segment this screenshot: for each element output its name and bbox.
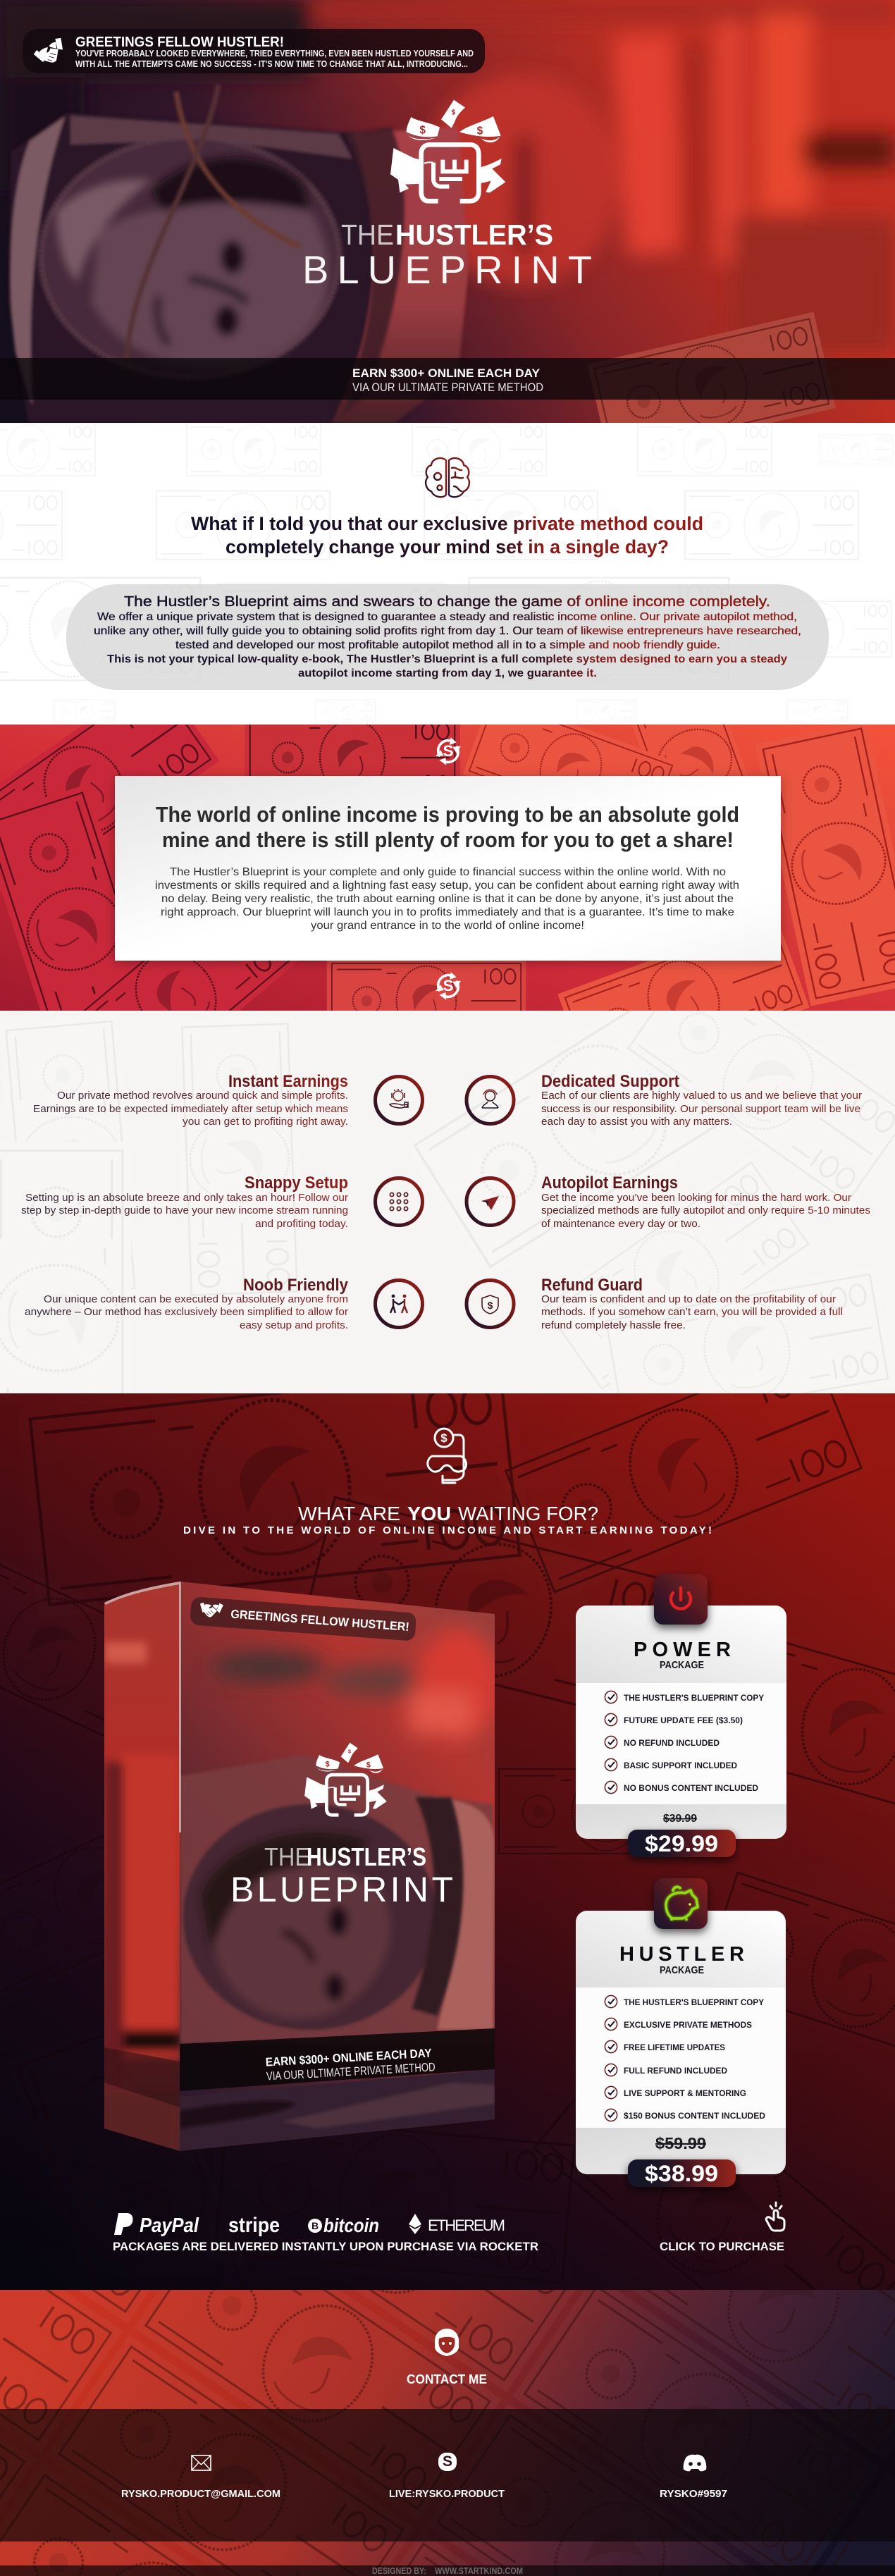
heading: completely change your mind set in a single day? [226, 536, 669, 557]
card: power package [576, 1574, 786, 1857]
price: 38.99: $38.99 [645, 2161, 718, 2186]
text pill: autopilot income starting from day 1, we guarantee it. [298, 667, 597, 679]
feature: autopilot earnings: Get the income you’ve been looking for minus the hard work. Our [541, 1192, 851, 1204]
designer credit: DESIGNED BY: [372, 2565, 426, 2576]
contact: email: RYSKO.PRODUCT@GMAIL.COM [121, 2488, 280, 2500]
white box: mine and there is still plenty of room for you to get a share! [162, 827, 734, 852]
white box: right approach. Our blueprint will launch you in to profits immediately and that is a guarantee. It’s time to make [161, 906, 734, 918]
heading: what are you waiting for: DIVE IN TO THE WORLD OF ONLINE INCOME AND START EARNING TODAY! [183, 1524, 712, 1536]
feature: refund guard: methods. If you somehow can’t earn, you will be provided a full [541, 1306, 843, 1318]
icon: coin hand [375, 1077, 423, 1123]
icon: agent [435, 2329, 459, 2356]
title: the hustler's blueprint: HUSTLER’S [395, 218, 553, 251]
white box: investments or skills required and a lightning fast easy setup, you can be confident about earning right away with [155, 880, 739, 892]
box greeting pill: GREETINGS FELLOW HUSTLER! [230, 1607, 409, 1634]
box title [230, 1842, 453, 1909]
card: hustler package: LIVE SUPPORT & MENTORING [624, 2088, 746, 2098]
icon: headset support [467, 1077, 514, 1123]
box title: BLUEPRINT [230, 1870, 453, 1909]
feature: noob friendly [25, 1276, 349, 1331]
feature: autopilot earnings: of maintenance every day or two. [541, 1218, 700, 1230]
payment logos: bitcoin [323, 2214, 379, 2236]
card: hustler package: $59.99 [655, 2134, 706, 2152]
feature: snappy setup: Setting up is an absolute breeze and only takes an hour! Follow our [25, 1192, 348, 1204]
feature: instant earnings: you can get to profiting right away. [183, 1116, 348, 1128]
feature: instant earnings: Earnings are to be expected immediately after setup which means [33, 1103, 348, 1115]
payment logos: PayPal [140, 2214, 199, 2237]
contact: discord: RYSKO#9597 [660, 2488, 727, 2500]
icon: piggy bank [654, 1878, 708, 1929]
panel: pricing [0, 1336, 895, 2404]
product box [104, 1579, 500, 2157]
feature: dedicated support: Dedicated Support [541, 1072, 679, 1091]
box title: HUSTLER’S [307, 1842, 426, 1871]
card: power package: THE HUSTLER'S BLUEPRINT COPY [624, 1693, 764, 1703]
box tagline [265, 2046, 436, 2083]
feature: refund guard: Our team is confident and up to date on the profitability of our [541, 1293, 836, 1305]
feature: snappy setup: Snappy Setup [245, 1173, 348, 1193]
feature: dedicated support: each day to assist you with any matters. [541, 1116, 732, 1128]
feature: snappy setup: and profiting today. [255, 1218, 348, 1230]
heading: what are you waiting for: WHAT ARE [298, 1503, 400, 1524]
bill roll on box [180, 1755, 495, 2044]
box tagline: VIA OUR ULTIMATE PRIVATE METHOD [266, 2060, 436, 2083]
panel: contact [0, 2290, 895, 2576]
contact: skype [389, 2453, 505, 2500]
card: hustler package [576, 1878, 786, 2187]
card: power package: NO REFUND INCLUDED [624, 1738, 720, 1748]
greeting pill: WITH ALL THE ATTEMPTS CAME NO SUCCESS - IT'S NOW TIME TO CHANGE THAT ALL, INTRODUCING... [75, 58, 468, 69]
heading [191, 513, 703, 557]
price: 29.99 [628, 1830, 736, 1857]
heading: what are you waiting for: WAITING FOR? [458, 1503, 598, 1524]
card: power package: FUTURE UPDATE FEE ($3.50) [624, 1715, 743, 1725]
greeting pill: YOU'VE PROBABALY LOOKED EVERYWHERE, TRIED EVERYTHING, EVEN BEEN HUSTLED YOURSELF AND [75, 48, 474, 58]
white box: your grand entrance in to the world of online income! [311, 920, 584, 932]
feature: noob friendly: Our unique content can be executed by absolutely anyone from [44, 1293, 348, 1305]
icon: paper plane [467, 1178, 514, 1225]
icon: diving mask coin [428, 1429, 466, 1483]
click to purchase: CLICK TO PURCHASE [660, 2240, 784, 2253]
icon: tap hand [766, 2202, 784, 2231]
feature: refund guard [541, 1276, 843, 1331]
roll of bills with Franklin portrait [8, 85, 469, 423]
feature: refund guard: refund completely hassle free. [541, 1319, 686, 1331]
text pill: We offer a unique private system that is designed to guarantee a steady and realistic income online. Our private autopilot method, [97, 611, 797, 623]
feature: snappy setup: step by step in-depth guide to have your new income stream running [21, 1204, 348, 1216]
contact: email [121, 2455, 280, 2500]
white box: no delay. Being very realistic, the truth about earning online is that it can be done by anyone, it’s just about the [161, 893, 734, 905]
contact: skype: LIVE:RYSKO.PRODUCT [389, 2488, 505, 2500]
card: hustler package: FULL REFUND INCLUDED [624, 2066, 727, 2076]
greeting pill [23, 29, 485, 73]
feature: dedicated support [541, 1072, 862, 1128]
text pill: unlike any other, will fully guide you to obtaining solid profits right from day 1. Our team of likewise entrepreneurs have researched, [94, 625, 801, 637]
greeting pill: GREETINGS FELLOW HUSTLER! [75, 35, 284, 50]
card: power package: BASIC SUPPORT INCLUDED [624, 1761, 737, 1770]
card: hustler package: PACKAGE [660, 1964, 704, 1976]
icon: shield dollar [467, 1280, 514, 1328]
price: 29.99: $29.99 [645, 1831, 718, 1856]
box front face [180, 1579, 500, 2157]
icon: handshake [32, 36, 70, 69]
title: the hustler's blueprint: BLUEPRINT [302, 247, 592, 292]
icon: brain [426, 458, 469, 497]
panel: gold mine [0, 725, 895, 1011]
icon: shield dollar: $ [488, 1300, 493, 1311]
card: hustler package: THE HUSTLER'S BLUEPRINT COPY [624, 1997, 764, 2007]
delivery note: PACKAGES ARE DELIVERED INSTANTLY UPON PURCHASE VIA ROCKETR [113, 2240, 538, 2253]
box logo [304, 1743, 387, 1815]
text pill: The Hustler’s Blueprint aims and swears to change the game of online income completely. [124, 593, 770, 610]
icon: two people [375, 1280, 423, 1328]
panel: features [0, 1011, 895, 1393]
icon: money cycle bottom [436, 972, 461, 1000]
designer credit: WWW.STARTKIND.COM [435, 2565, 523, 2576]
icon: dot grid setup [375, 1178, 423, 1225]
title: the hustler's blueprint [302, 218, 592, 292]
payment logos: ETHEREUM [428, 2217, 505, 2234]
icon: money cycle top [436, 737, 461, 765]
earn banner [0, 358, 895, 400]
white box: The Hustler’s Blueprint is your complete and only guide to financial success within the online world. With no [170, 866, 726, 878]
card: power package: $39.99 [663, 1813, 697, 1825]
price: 38.99 [628, 2159, 736, 2187]
contact bar [0, 2409, 895, 2576]
contact me: CONTACT ME [407, 2372, 487, 2386]
feature: dedicated support: Each of our clients are highly valued to us and we believe that your [541, 1090, 862, 1102]
feature: instant earnings: Instant Earnings [228, 1072, 348, 1091]
feature: instant earnings [33, 1072, 348, 1128]
contact: skype: S [443, 2453, 452, 2470]
payment logos: B [311, 2220, 319, 2231]
payment logos [114, 2213, 505, 2237]
feature: noob friendly: anywhere – Our method has exclusively been simplified to allow for [25, 1306, 348, 1318]
icon: hustler logo [390, 100, 505, 201]
panel: intro [0, 419, 895, 725]
box side face [104, 1579, 180, 2153]
feature: autopilot earnings: specialized methods are fully autopilot and only require 5-10 minutes [541, 1204, 870, 1216]
title: the hustler's blueprint: THE [341, 218, 394, 251]
text pill: This is not your typical low-quality e-book, The Hustler’s Blueprint is a full complete system designed to earn you a steady [107, 653, 787, 665]
card: hustler package: FREE LIFETIME UPDATES [624, 2042, 725, 2052]
feature: refund guard: Refund Guard [541, 1276, 643, 1295]
white box: The world of online income is proving to be an absolute gold [156, 802, 739, 827]
card: power package: NO BONUS CONTENT INCLUDED [624, 1783, 758, 1793]
card: power package: POWER [634, 1639, 731, 1661]
card: hustler package: EXCLUSIVE PRIVATE METHODS [624, 2020, 752, 2030]
heading: what are you waiting for: YOU [407, 1503, 451, 1524]
feature: instant earnings: Our private method revolves around quick and simple profits. [57, 1090, 348, 1102]
panel: hero banner [0, 0, 895, 460]
box tagline: EARN $300+ ONLINE EACH DAY [265, 2046, 433, 2069]
text pill: tested and developed our most profitable autopilot method all in to a simple and noob friendly guide. [175, 639, 720, 651]
earn banner: EARN $300+ ONLINE EACH DAY [352, 366, 541, 380]
feature: noob friendly: easy setup and profits. [240, 1319, 348, 1331]
feature: noob friendly: Noob Friendly [243, 1276, 349, 1295]
box title: THE [264, 1842, 310, 1871]
feature: autopilot earnings: Autopilot Earnings [541, 1173, 678, 1193]
heading: What if I told you that our exclusive private method could [191, 513, 703, 534]
card: hustler package: HUSTLER [619, 1943, 744, 1966]
contact: discord [660, 2455, 727, 2500]
card: hustler package: $150 BONUS CONTENT INCLUDED [624, 2111, 765, 2121]
feature: snappy setup [21, 1173, 348, 1230]
designer credit [372, 2565, 523, 2576]
text pill [66, 584, 829, 690]
payment logos: stripe [228, 2214, 280, 2237]
card: power package: PACKAGE [660, 1659, 704, 1671]
icon: diving mask coin: $ [440, 1431, 448, 1445]
box fold highlight [104, 1582, 181, 1832]
feature: autopilot earnings [541, 1173, 870, 1230]
white box [115, 776, 781, 961]
feature: dedicated support: success is our responsibility. Our personal support team will be live [541, 1103, 860, 1115]
earn banner: VIA OUR ULTIMATE PRIVATE METHOD [352, 381, 543, 394]
box greeting pill [190, 1596, 416, 1641]
icon: power [654, 1574, 708, 1625]
heading: what are you waiting for [183, 1503, 712, 1536]
